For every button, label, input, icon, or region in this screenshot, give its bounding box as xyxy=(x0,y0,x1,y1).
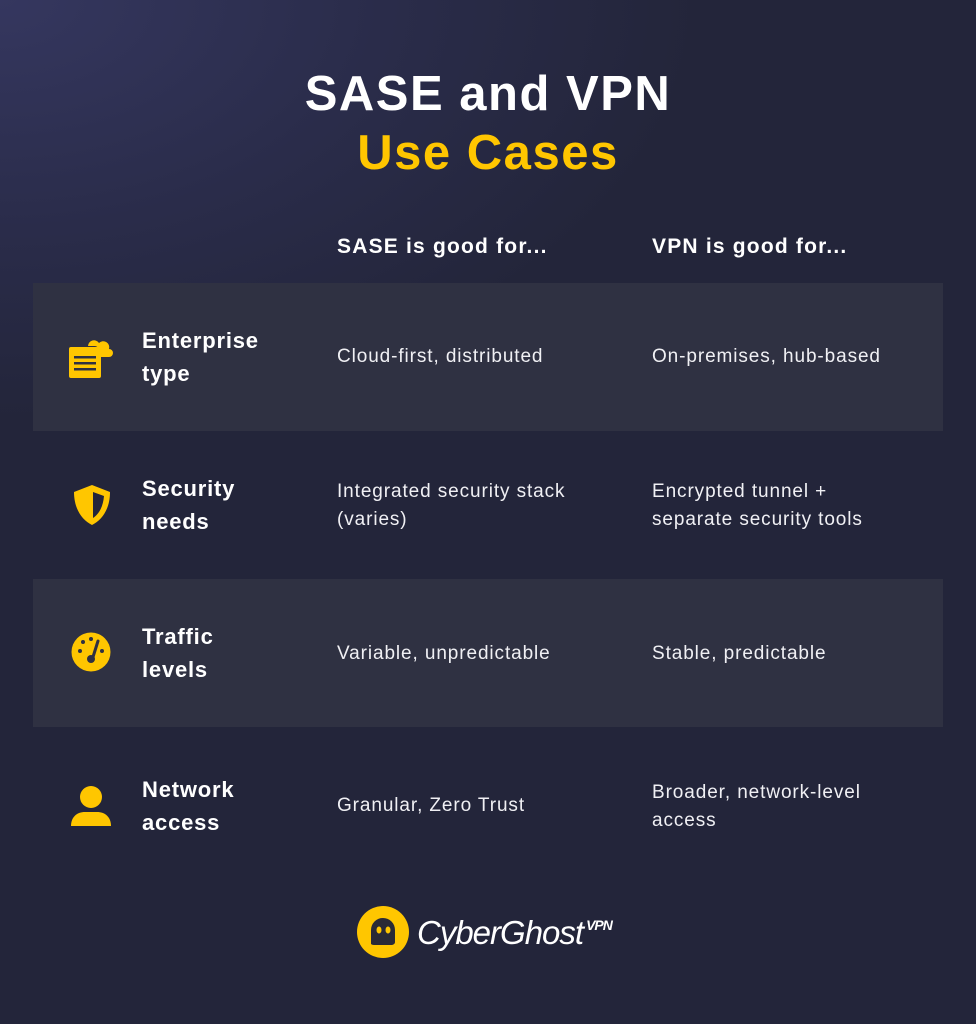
label: security: needs xyxy=(142,509,210,534)
row band 1 xyxy=(33,283,943,431)
label: traffic: Traffic xyxy=(142,624,214,649)
value: VPN network xyxy=(652,782,861,831)
header: SASE: SASE is good for... xyxy=(337,235,548,258)
label: enterprise: type xyxy=(142,361,190,386)
label: network: Network xyxy=(142,777,234,802)
value: SASE security: Integrated security stack xyxy=(337,481,565,502)
value: SASE traffic: Variable, unpredictable xyxy=(337,643,551,664)
value: VPN security: separate security tools xyxy=(652,509,863,530)
icon: person xyxy=(71,786,111,826)
label: traffic xyxy=(142,624,214,682)
icon: enterprise xyxy=(69,340,113,378)
value: VPN enterprise: On-premises, hub-based xyxy=(652,346,881,367)
label: network: access xyxy=(142,810,220,835)
header: VPN: VPN is good for... xyxy=(652,235,847,258)
label: network xyxy=(142,777,234,835)
value: VPN security: Encrypted tunnel + xyxy=(652,481,827,502)
label: enterprise: Enterprise xyxy=(142,328,259,353)
title: SASE and VPN xyxy=(305,67,671,121)
value: VPN security xyxy=(652,481,863,530)
label: traffic: levels xyxy=(142,657,208,682)
icon: shield xyxy=(74,485,110,525)
subtitle: Use Cases xyxy=(357,126,619,180)
row band 3 xyxy=(33,579,943,727)
label: security: Security xyxy=(142,476,235,501)
value: SASE security xyxy=(337,481,565,530)
label: security xyxy=(142,476,235,534)
value: SASE security: (varies) xyxy=(337,509,408,530)
value: SASE network: Granular, Zero Trust xyxy=(337,795,525,816)
logo xyxy=(357,906,614,958)
icon: gauge xyxy=(72,632,110,672)
value: SASE enterprise: Cloud-first, distributed xyxy=(337,346,543,367)
icon: ghost xyxy=(357,906,409,958)
value: VPN network: Broader, network-level xyxy=(652,782,861,803)
value: VPN traffic: Stable, predictable xyxy=(652,643,826,664)
value: VPN network: access xyxy=(652,810,717,831)
logo text: CyberGhostVPN xyxy=(417,914,612,951)
label: enterprise xyxy=(142,328,259,386)
